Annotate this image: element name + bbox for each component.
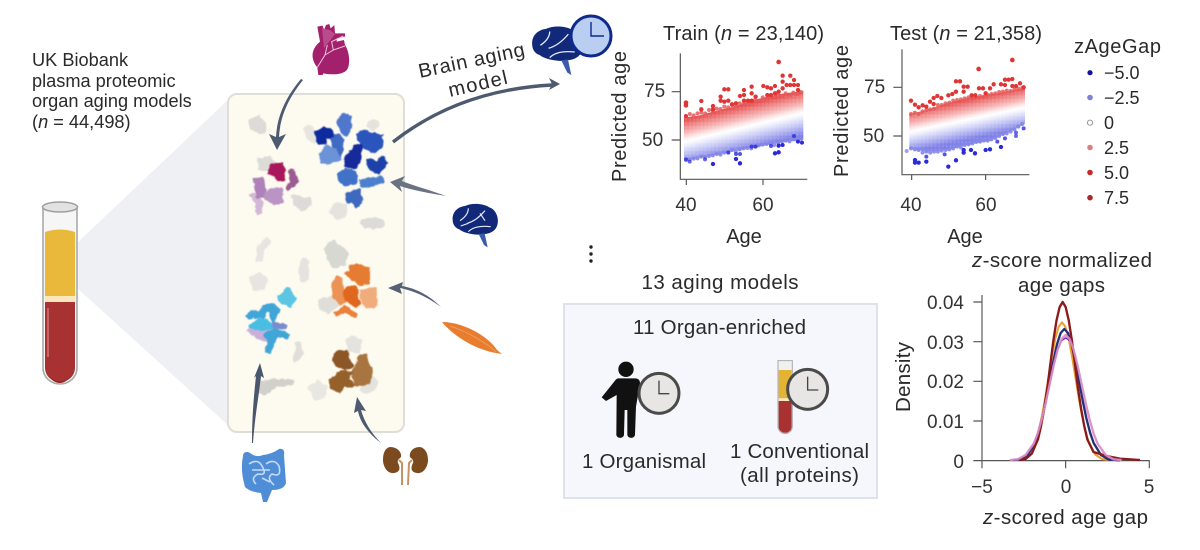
legend: zAgeGap: 0 (1104, 113, 1114, 133)
intro text: plasma proteomic (32, 71, 176, 91)
icon: muscle (442, 322, 502, 354)
protein cluster: blue (316, 114, 386, 207)
y tick labels: 0.03 (927, 333, 964, 354)
y tick labels: 0.04 (927, 293, 964, 314)
label: brain aging model (416, 39, 527, 102)
zoom cone from tube to panel (77, 99, 229, 426)
icon: kidneys (383, 447, 428, 485)
legend: zAgeGap (1074, 36, 1161, 208)
curve: orange (1015, 322, 1109, 460)
heading: 13 aging models: 13 aging models (642, 271, 798, 294)
label: brain aging model: model (446, 67, 510, 102)
intro text: (n = 44,498) (32, 112, 131, 132)
train title: Train (n = 23,140) (663, 23, 824, 45)
train y label: Predicted age (609, 51, 631, 182)
panel: model types (564, 304, 877, 498)
train plot area (672, 53, 807, 185)
test title: Test (n = 21,358) (890, 23, 1042, 45)
test tick labels: 60 (975, 195, 997, 216)
train tick labels: 60 (752, 195, 774, 216)
legend: zAgeGap: −2.5 (1104, 88, 1140, 108)
scatter: test (831, 23, 1042, 248)
legend: zAgeGap: 2.5 (1104, 138, 1129, 158)
chart title (971, 249, 1152, 297)
train tick labels (642, 81, 774, 216)
icon: heart (313, 24, 349, 75)
y tick labels: 0 (953, 452, 964, 473)
arrow: brain aging model (393, 78, 560, 142)
icon: person with clock (602, 362, 679, 438)
curve: navy (1013, 329, 1120, 460)
label: conventional: (all proteins) (740, 464, 859, 487)
label: brain aging model: Brain aging (416, 39, 527, 83)
legend: zAgeGap: −5.0 (1104, 63, 1140, 83)
test tick labels: 75 (864, 77, 885, 98)
icon: brain (453, 204, 498, 247)
arrow: heart to proteins (269, 79, 303, 150)
ellipsis (589, 245, 593, 263)
y tick labels: 0.01 (927, 412, 964, 433)
train x label: Age (726, 226, 762, 248)
label: organismal: 1 Organismal (582, 450, 706, 473)
curve: pink (1010, 335, 1122, 460)
grey background proteins lower (251, 239, 377, 399)
test x label: Age (947, 226, 983, 248)
train tick labels: 75 (644, 81, 665, 102)
x tick labels (971, 477, 1154, 498)
test plot area (893, 49, 1029, 180)
train tick labels: 50 (642, 130, 663, 151)
x tick labels: 5 (1144, 477, 1154, 498)
arrow: kidney to proteins (354, 397, 381, 443)
chart title: z-score normalized (971, 249, 1152, 272)
panel: plasma proteins (228, 94, 404, 432)
y tick labels: 0.02 (927, 372, 964, 393)
intro text: organ aging models (32, 91, 192, 111)
test tick labels: 40 (900, 195, 922, 216)
legend: zAgeGap: 5.0 (1104, 163, 1129, 183)
curve: dark red (1019, 302, 1140, 460)
density chart (892, 249, 1154, 529)
test tick labels: 50 (863, 126, 884, 147)
train tick labels: 40 (675, 195, 697, 216)
legend: zAgeGap: zAgeGap (1074, 36, 1161, 58)
protein cluster: orange (333, 265, 376, 316)
icon: blood tube (42, 202, 78, 384)
icon: brain with clock (532, 16, 611, 75)
curve: purple (1050, 338, 1074, 383)
legend: zAgeGap: 7.5 (1104, 188, 1129, 208)
arrow: intestine to proteins (252, 363, 264, 443)
icon: intestine (242, 449, 286, 502)
test tick labels (863, 77, 997, 216)
arrow: muscle to proteins (388, 282, 441, 307)
x tick labels: 0 (1061, 477, 1071, 498)
label: conventional: 1 Conventional (730, 440, 869, 463)
label: conventional (730, 440, 869, 487)
protein cluster: magenta (250, 164, 297, 214)
protein cluster: brown (329, 351, 372, 392)
grey background proteins upper (250, 117, 383, 227)
chart title: age gaps (1018, 274, 1105, 297)
arrow: brain to proteins (390, 176, 446, 196)
y axis label: Density (892, 341, 915, 412)
test y label: Predicted age (831, 45, 853, 177)
intro text: UK Biobank (32, 50, 129, 70)
x axis label: z-scored age gap (982, 506, 1148, 529)
density axes and curves (973, 295, 1149, 468)
protein cluster: cyan (247, 289, 295, 354)
scatter: train (609, 23, 824, 248)
icon: tube with clock (778, 361, 828, 433)
panel title: 11 Organ-enriched (633, 316, 806, 339)
x tick labels: −5 (971, 477, 993, 498)
y tick labels (927, 293, 964, 473)
